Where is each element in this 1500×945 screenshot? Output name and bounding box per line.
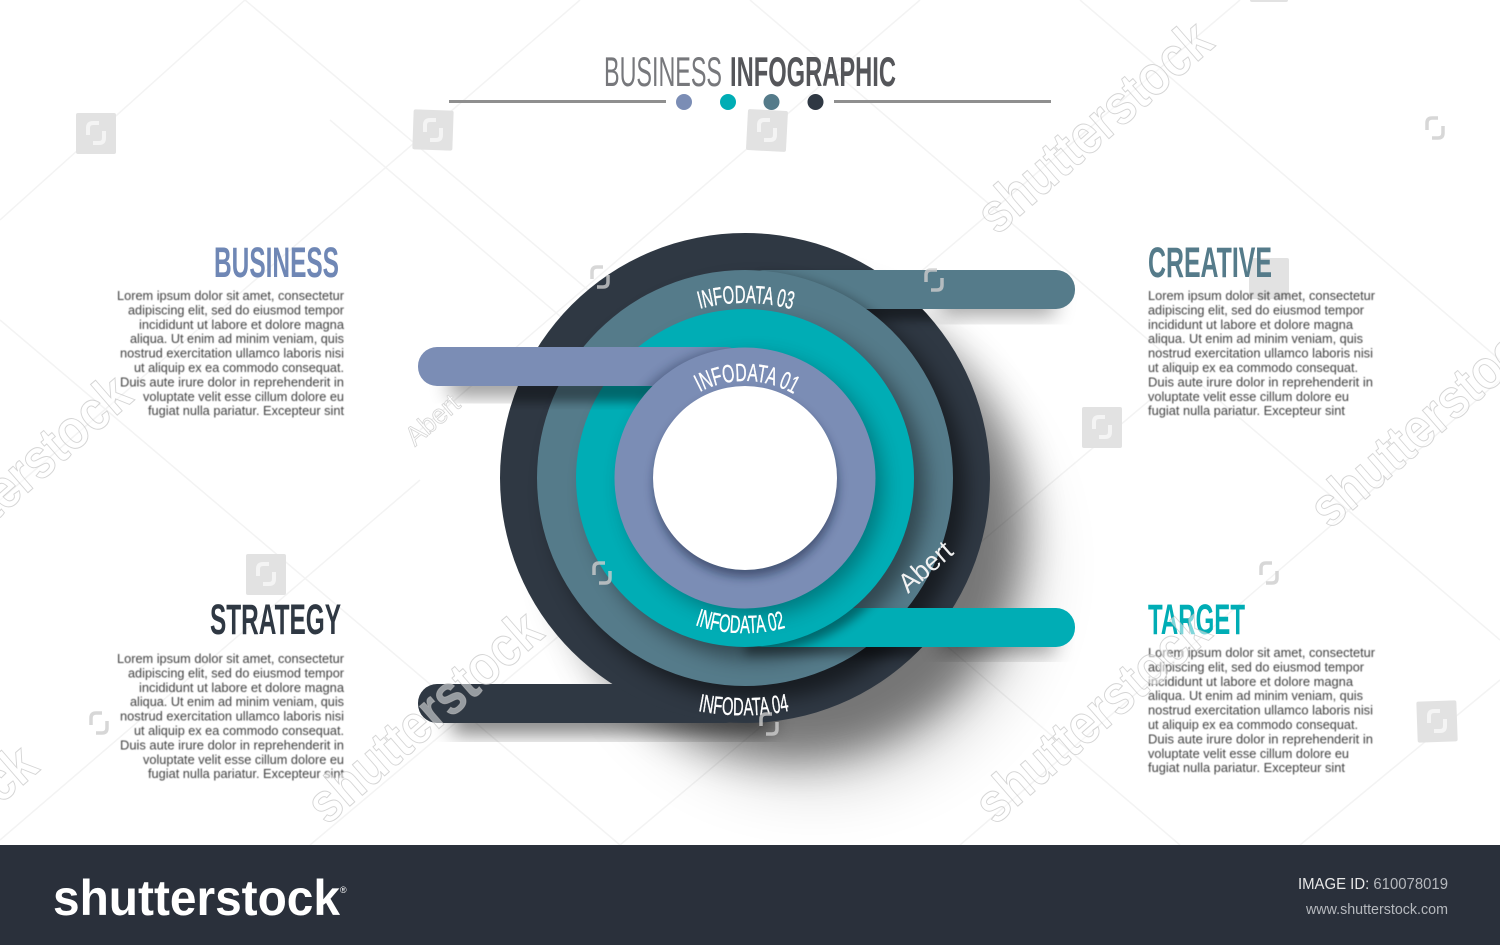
registered mark: ® bbox=[340, 885, 347, 895]
shutterstock watermarks: shutterstock bbox=[962, 597, 1222, 835]
panel: strategy: Lorem ipsum dolor sit amet, consectetur bbox=[117, 652, 344, 666]
ring 4: dark circle and STRATEGY bar bbox=[418, 233, 990, 723]
panel: business: BUSINESS bbox=[214, 239, 339, 287]
panel: strategy bbox=[117, 596, 345, 781]
panel: business bbox=[117, 239, 345, 418]
panel: strategy: Duis aute irure dolor in reprehenderit in bbox=[120, 738, 344, 752]
ring 2: teal circle and TARGET bar bbox=[576, 309, 1075, 653]
panel: creative: Duis aute irure dolor in reprehenderit in bbox=[1148, 375, 1373, 389]
title: INFOGRAPHIC bbox=[730, 48, 896, 95]
panel: target bbox=[1148, 596, 1375, 775]
panel: target: aliqua. Ut enim ad minim veniam, quis bbox=[1148, 689, 1363, 703]
small watermark marks bbox=[91, 118, 1443, 734]
panel: target: Lorem ipsum dolor sit amet, consectetur bbox=[1148, 646, 1375, 660]
panel: target: Duis aute irure dolor in reprehenderit in bbox=[1148, 732, 1373, 746]
image id: IMAGE ID: 610078019 bbox=[1298, 876, 1448, 893]
panel: target: fugiat nulla pariatur. Excepteur sint bbox=[1148, 761, 1346, 775]
panel: creative: CREATIVE bbox=[1148, 239, 1272, 287]
panel: strategy: voluptate velit esse cillum dolore eu bbox=[143, 753, 344, 767]
panel: strategy: ut aliquip ex ea commodo consequat. bbox=[134, 724, 344, 738]
footer logo: shutterstock bbox=[53, 870, 340, 926]
title rule with dots bbox=[449, 94, 1051, 110]
panel: business: adipiscing elit, sed do eiusmod tempor bbox=[128, 303, 344, 317]
diagonal shadow under the circle bbox=[450, 288, 1055, 780]
panel: creative bbox=[1148, 239, 1375, 418]
panel: target: ut aliquip ex ea commodo consequat. bbox=[1148, 718, 1358, 732]
ring labels: INFODATA 01 bbox=[693, 364, 799, 394]
panel: business: ut aliquip ex ea commodo consequat. bbox=[134, 361, 344, 375]
shutterstock watermarks: Abert bbox=[892, 535, 959, 599]
website: www.shutterstock.com bbox=[1305, 902, 1448, 918]
panel: creative: Lorem ipsum dolor sit amet, consectetur bbox=[1148, 289, 1375, 303]
panel: creative: voluptate velit esse cillum dolore eu bbox=[1148, 390, 1349, 404]
footer bar bbox=[0, 845, 1500, 945]
panel: business: incididunt ut labore et dolore magna bbox=[139, 318, 344, 332]
ring 3: grey teal circle and CREATIVE bar bbox=[537, 270, 1075, 688]
ring labels: INFODATA 03 bbox=[696, 286, 794, 309]
ring labels bbox=[693, 286, 799, 716]
panel: strategy: STRATEGY bbox=[210, 596, 341, 644]
panel: creative: fugiat nulla pariatur. Excepteur sint bbox=[1148, 404, 1346, 418]
panel: target: TARGET bbox=[1148, 596, 1245, 644]
title: BUSINESS bbox=[604, 48, 722, 95]
panel: business: voluptate velit esse cillum dolore eu bbox=[143, 390, 344, 404]
panel: creative: incididunt ut labore et dolore magna bbox=[1148, 318, 1353, 332]
shutterstock watermarks: Abert bbox=[399, 388, 466, 452]
panel: creative: nostrud exercitation ullamco laboris nisi bbox=[1148, 347, 1373, 361]
ring 1: periwinkle circle and BUSINESS bar bbox=[418, 347, 876, 609]
shadow on grey ring bbox=[578, 312, 936, 670]
panel: creative: ut aliquip ex ea commodo consequat. bbox=[1148, 361, 1358, 375]
ring labels: INFODATA 02 bbox=[696, 608, 786, 634]
panel: target: nostrud exercitation ullamco laboris nisi bbox=[1148, 704, 1373, 718]
centre hole with inner shadow bbox=[653, 386, 838, 577]
panel: business: aliqua. Ut enim ad minim veniam, quis bbox=[130, 332, 344, 346]
panel: business: Duis aute irure dolor in reprehenderit in bbox=[120, 375, 344, 389]
panel: creative: adipiscing elit, sed do eiusmod tempor bbox=[1148, 303, 1364, 317]
panel: strategy: aliqua. Ut enim ad minim veniam, quis bbox=[130, 695, 344, 709]
shadow of BUSINESS bar bbox=[511, 386, 652, 408]
panel: business: nostrud exercitation ullamco laboris nisi bbox=[120, 347, 344, 361]
watermark squares bbox=[76, 0, 1458, 743]
shadow on teal ring bbox=[623, 356, 883, 616]
panel: strategy: incididunt ut labore et dolore magna bbox=[139, 681, 344, 695]
panel: target: adipiscing elit, sed do eiusmod tempor bbox=[1148, 660, 1364, 674]
panel: strategy: nostrud exercitation ullamco laboris nisi bbox=[120, 710, 344, 724]
panel: creative: aliqua. Ut enim ad minim veniam, quis bbox=[1148, 332, 1363, 346]
panel: business: Lorem ipsum dolor sit amet, consectetur bbox=[117, 289, 344, 303]
ring labels: INFODATA 04 bbox=[699, 694, 788, 716]
panel: business: fugiat nulla pariatur. Excepteur sint bbox=[148, 404, 345, 418]
shutterstock watermarks: shutterstock bbox=[294, 597, 554, 835]
panel: target: incididunt ut labore et dolore magna bbox=[1148, 675, 1353, 689]
shadow on dark ring bbox=[558, 309, 973, 707]
panel: strategy: adipiscing elit, sed do eiusmod tempor bbox=[128, 666, 344, 680]
panel: strategy: fugiat nulla pariatur. Excepteur sint bbox=[148, 767, 345, 781]
panel: target: voluptate velit esse cillum dolore eu bbox=[1148, 747, 1349, 761]
